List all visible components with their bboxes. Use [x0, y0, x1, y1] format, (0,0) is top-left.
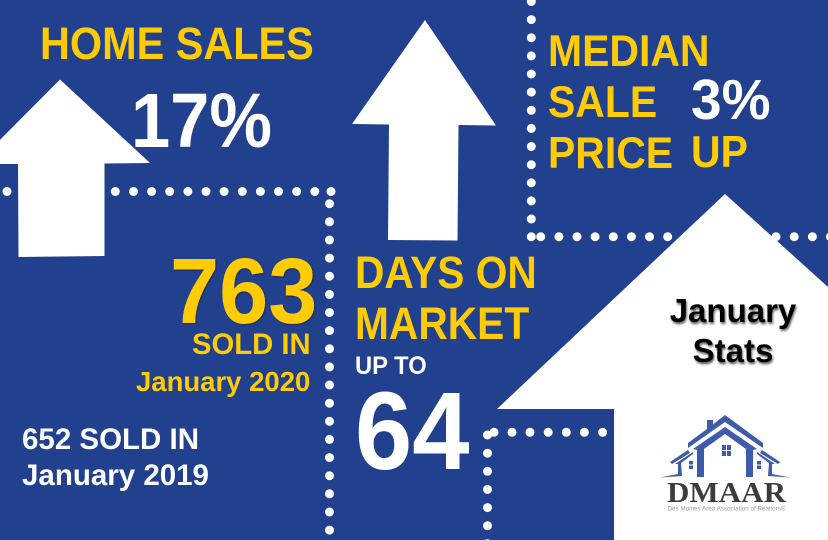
label: sold in: SOLD IN — [192, 328, 311, 361]
stat: 763 sold: 763 — [170, 239, 317, 343]
arrow: days on market up — [352, 20, 496, 240]
title: January Stats — [670, 292, 798, 369]
dotted divider: lower middle — [483, 428, 607, 540]
heading: median sale price: SALE — [548, 78, 657, 127]
heading: home sales: HOME SALES — [40, 18, 314, 69]
title: January Stats: Stats — [693, 332, 773, 369]
stat: 3 percent: 3% — [691, 68, 771, 132]
text: 652 sold in January 2019: January 2019 — [22, 459, 209, 492]
text: 652 sold in January 2019 — [22, 423, 209, 492]
logo wordmark: DMAAR — [667, 478, 787, 509]
logo: DMAAR house icon — [660, 415, 790, 512]
heading: median sale price — [548, 27, 709, 178]
arrow: house shape with stats — [497, 194, 828, 540]
heading: median sale price: MEDIAN — [548, 27, 709, 76]
dotted divider: median price panel — [527, 0, 828, 241]
logo tagline: Des Moines Area Association of Realtors® — [668, 504, 786, 512]
heading: days on market: DAYS ON — [355, 247, 537, 298]
label: up: UP — [691, 128, 748, 177]
heading: median sale price: PRICE — [548, 129, 673, 178]
stat: 17 percent: 17% — [131, 78, 272, 164]
label: January 2020: January 2020 — [136, 366, 310, 397]
heading: days on market — [355, 247, 537, 349]
label: up to: UP TO — [355, 352, 427, 380]
arrow: home sales up — [0, 80, 150, 257]
stat: 64 days: 64 — [355, 370, 469, 493]
text: 652 sold in January 2019: 652 SOLD IN — [22, 423, 199, 456]
dotted divider: left panel — [2, 187, 336, 535]
heading: days on market: MARKET — [355, 298, 529, 349]
title: January Stats: January — [670, 292, 796, 329]
